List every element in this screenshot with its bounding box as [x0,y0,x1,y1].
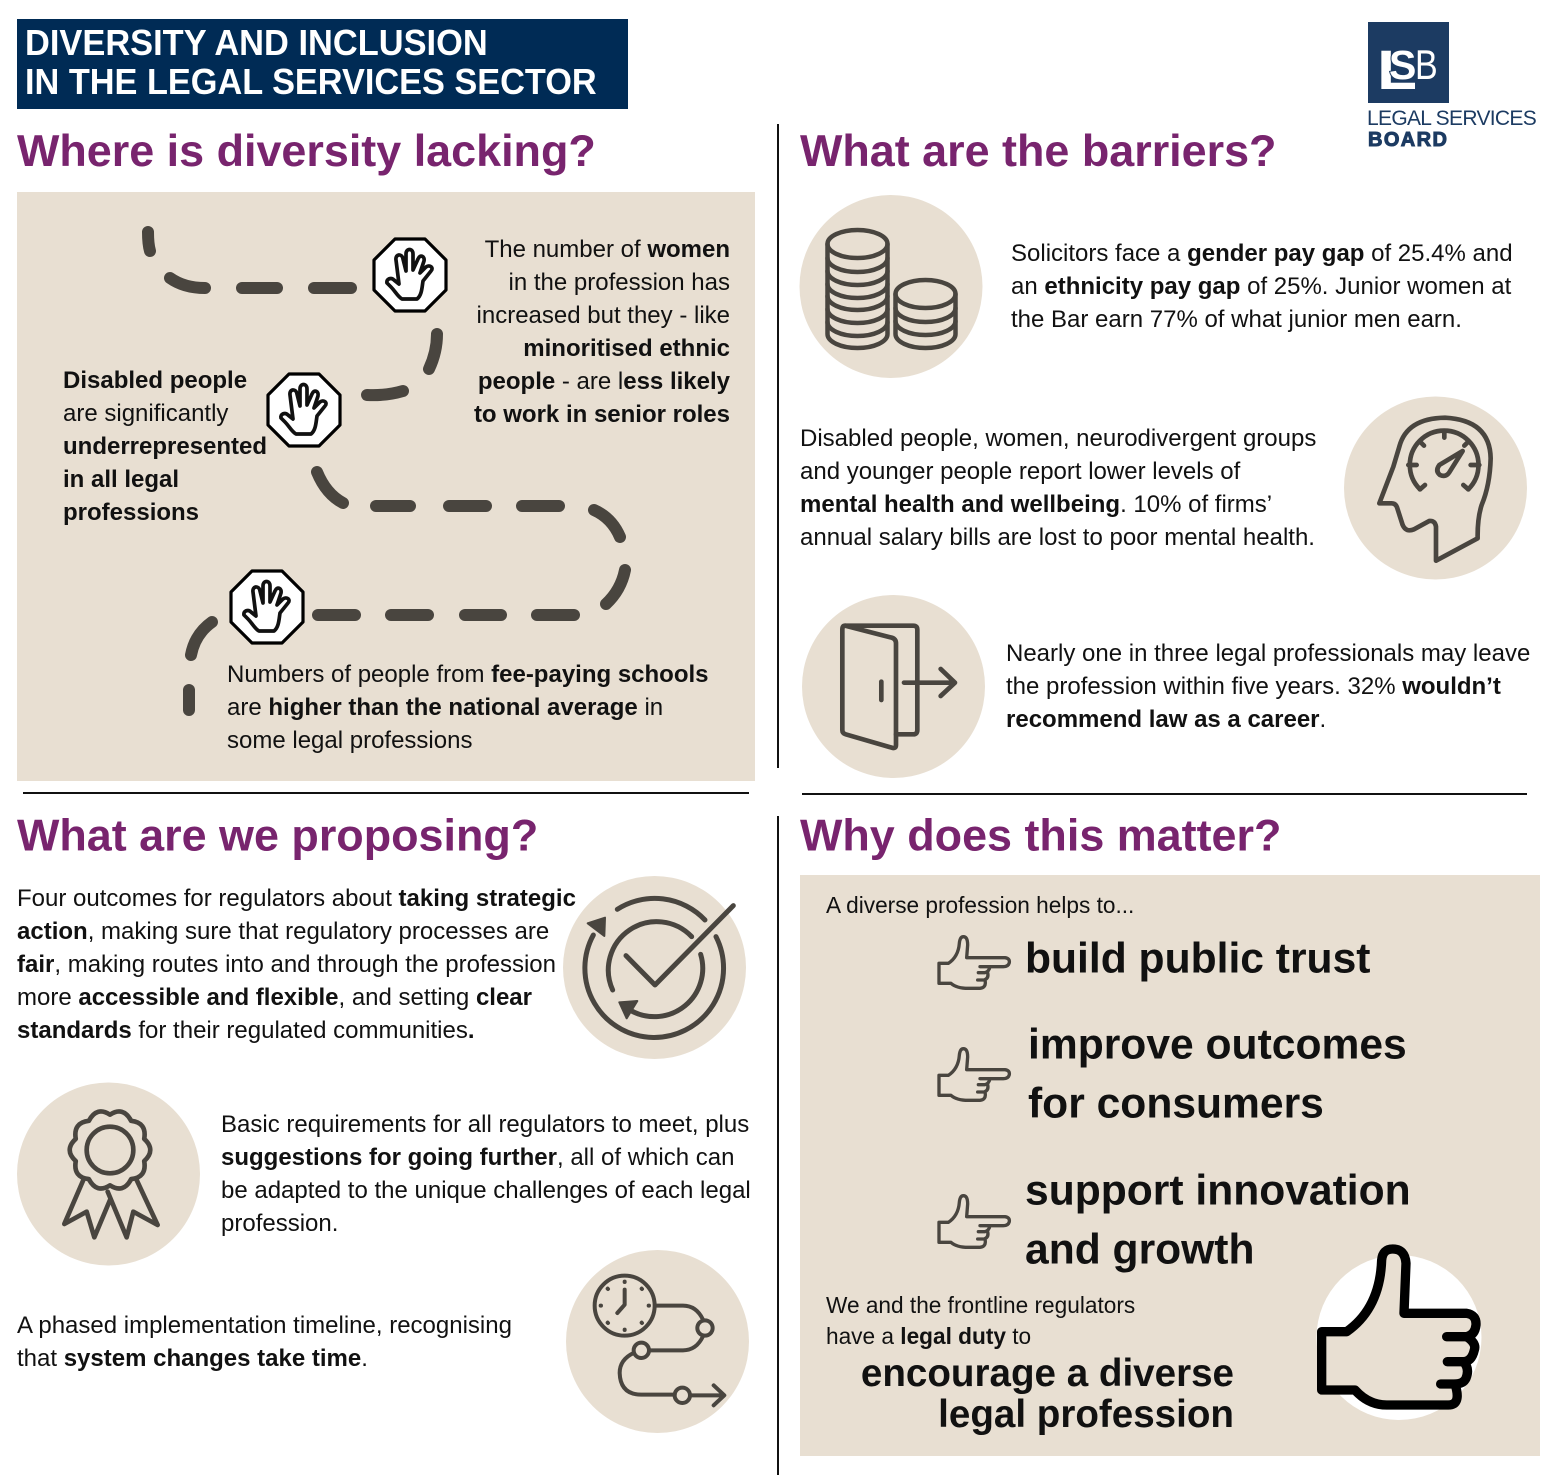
text: mental health: mental health and wellbeing. 10% of firms’ [800,491,1272,518]
proposal: basic requirements [17,1082,751,1266]
heading: where is diversity lacking: Where is diversity lacking? [17,125,596,176]
text: basic requirements: Basic requirements for all regulators to meet, plus [221,1111,749,1138]
text: mental health: Disabled people, women, neurodivergent groups [800,425,1316,452]
benefit: support innovation: and growth [1025,1226,1255,1274]
icon: stop hand 2 [268,374,340,446]
title banner: DIVERSITY AND INCLUSION [25,22,488,63]
benefit: improve outcomes: improve outcomes [1028,1020,1407,1068]
panel: why does this matter [800,875,1540,1456]
proposal: four outcomes [17,876,746,1059]
text: women and minoritised ethnic people: minoritised ethnic [523,335,730,362]
text: phased timeline [17,1312,512,1372]
text: basic requirements [221,1111,751,1237]
text: basic requirements: suggestions for going further, all of which can [221,1144,734,1171]
logo: Legal Services Board [1367,22,1537,151]
text: pay gap: Solicitors face a gender pay gap of 25.4% and [1011,240,1513,267]
text: disabled people [63,367,267,526]
text: mental health: and younger people report lower levels of [800,458,1241,485]
benefit: build public trust: build public trust [1025,934,1370,982]
text: legal duty: have a legal duty to [826,1323,1031,1349]
heading: what are the barriers: What are the barriers? [800,125,1276,176]
text: mental health: annual salary bills are lost to poor mental health. [800,524,1315,551]
text: disabled people: in all legal [63,466,179,493]
barrier: mental health [800,396,1527,580]
proposal: phased timeline [17,1250,749,1433]
text: basic requirements: be adapted to the unique challenges of each legal [221,1177,751,1204]
text: disabled people: underrepresented [63,433,267,460]
callout: encourage a diverse legal profession: encourage a diverse [861,1352,1234,1395]
text: intro: A diverse profession helps to... [826,892,1134,918]
icon: cycle with check mark [563,876,746,1059]
benefit: improve outcomes: for consumers [1028,1080,1324,1128]
logo: Legal Services Board: BOARD [1368,129,1448,151]
text: women and minoritised ethnic people: The number of women [485,236,730,263]
text: fee-paying schools: Numbers of people from fee-paying schools [227,661,709,688]
text: women and minoritised ethnic people: in the profession has [509,269,730,296]
icon: stop hand 3 [231,571,303,643]
text: legal duty: We and the frontline regulators [826,1292,1135,1318]
title banner: IN THE LEGAL SERVICES SECTOR [25,61,597,102]
icon: door with arrow [802,595,985,778]
icon: pointing hand 1 [939,937,1009,988]
icon: award ribbon [17,1082,200,1266]
benefit: support innovation: support innovation [1025,1166,1411,1214]
benefit: improve outcomes [1028,1020,1407,1128]
text: disabled people: Disabled people [63,367,247,394]
icon: head with gauge [1344,396,1527,580]
text: disabled people: professions [63,499,199,526]
text: pay gap: an ethnicity pay gap of 25%. Junior women at [1011,273,1512,300]
panel: where is diversity lacking [17,192,755,781]
text: leaving: recommend law as a career. [1006,706,1326,733]
text: women and minoritised ethnic people: increased but they - like [477,302,730,329]
text: women and minoritised ethnic people: to work in senior roles [474,401,730,428]
callout: encourage a diverse legal profession: legal profession [938,1393,1234,1436]
benefit: support innovation [1025,1166,1411,1274]
icon: pointing hand 3 [939,1196,1009,1247]
text: fee-paying schools: some legal professions [227,727,472,754]
icon: coins [800,195,982,378]
heading: what are we proposing: What are we proposing? [17,810,538,860]
icon: pointing hand 2 [939,1049,1009,1100]
text: legal duty [826,1292,1135,1349]
text: four outcomes: action, making sure that regulatory processes are [17,918,549,945]
logo: Legal Services Board: B [1415,43,1438,89]
logo: Legal Services Board: L [1377,38,1417,101]
dashed path [148,232,625,710]
heading: why does this matter: Why does this matter? [800,810,1281,860]
barrier: pay gap [800,195,1513,378]
text: four outcomes: more accessible and flexible, and setting clear [17,984,532,1011]
text: women and minoritised ethnic people: people - are less likely [478,368,731,395]
text: mental health [800,425,1316,551]
text: fee-paying schools: are higher than the national average in [227,694,663,721]
text: pay gap [1011,240,1513,333]
title banner [17,19,628,109]
text: leaving: Nearly one in three legal professionals may leave [1006,640,1530,667]
text: pay gap: the Bar earn 77% of what junior men earn. [1011,306,1462,333]
text: leaving [1006,640,1530,733]
text: disabled people: are significantly [63,400,228,427]
icon: thumbs up [1316,1249,1482,1420]
text: leaving: the profession within five years. 32% wouldn’t [1006,673,1501,700]
text: fee-paying schools [227,661,709,754]
logo: Legal Services Board: LEGAL SERVICES [1367,107,1537,130]
text: basic requirements: profession. [221,1210,338,1237]
barrier: leaving the profession [802,595,1530,778]
icon: clock and route [566,1250,749,1433]
text: four outcomes: standards for their regulated communities. [17,1017,475,1044]
callout: encourage a diverse legal profession [861,1352,1234,1436]
text: phased timeline: that system changes take time. [17,1345,368,1372]
text: women and minoritised ethnic people [474,236,731,428]
text: four outcomes: Four outcomes for regulators about taking strategic [17,885,576,912]
text: four outcomes: fair, making routes into and through the profession [17,951,556,978]
text: phased timeline: A phased implementation timeline, recognising [17,1312,512,1339]
logo: Legal Services Board: S [1389,42,1416,88]
text: four outcomes [17,885,576,1044]
icon: stop hand 1 [374,239,446,311]
